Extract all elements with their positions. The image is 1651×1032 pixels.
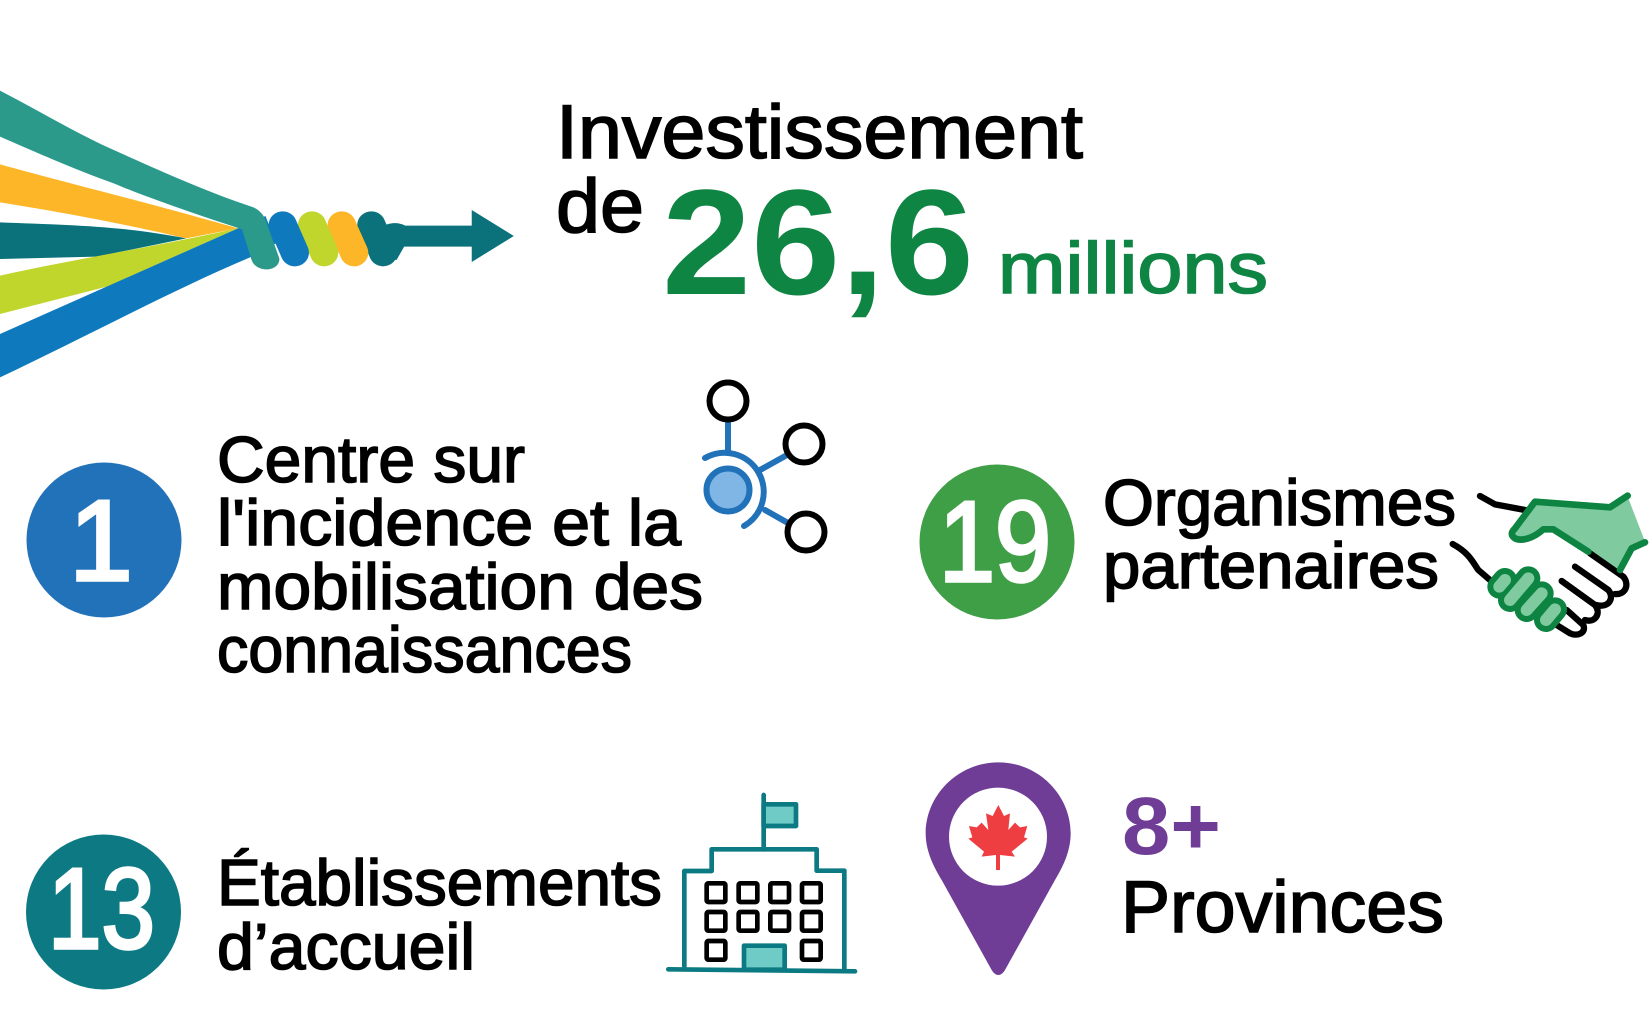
text: provinces	[1121, 781, 1444, 948]
heading: investissement: 26,6	[662, 158, 974, 326]
heading: investissement: millions	[998, 229, 1268, 309]
icon: braided ribbons arrow	[0, 91, 514, 377]
text: centre: l'incidence et la	[217, 486, 682, 559]
text: etablissements	[217, 846, 662, 983]
badge: 1: 1	[69, 478, 133, 605]
text: organismes: Organismes	[1103, 466, 1456, 539]
text: centre: mobilisation des	[217, 550, 703, 623]
icon: handshake	[1453, 496, 1645, 635]
text: provinces: 8+	[1122, 781, 1221, 872]
text: centre: connaissances	[217, 613, 632, 686]
heading: investissement	[556, 90, 1268, 326]
icon: network	[705, 382, 824, 550]
text: organismes	[1103, 466, 1456, 602]
text: organismes: partenaires	[1103, 529, 1439, 602]
badge: 19	[920, 464, 1074, 620]
text: provinces: Provinces	[1121, 867, 1444, 948]
badge: 13: 13	[48, 846, 155, 973]
badge: 1	[26, 462, 182, 618]
badge: 19: 19	[939, 479, 1051, 606]
badge: 13	[26, 834, 181, 990]
heading: investissement: Investissement	[556, 90, 1083, 175]
icon: school building	[668, 795, 855, 971]
text: centre	[217, 423, 703, 686]
text: centre: Centre sur	[217, 423, 525, 496]
icon: map pin with maple leaf	[926, 762, 1071, 975]
heading: investissement: de	[556, 164, 644, 249]
text: etablissements: d’accueil	[217, 910, 475, 983]
text: etablissements: Établissements	[217, 846, 662, 919]
